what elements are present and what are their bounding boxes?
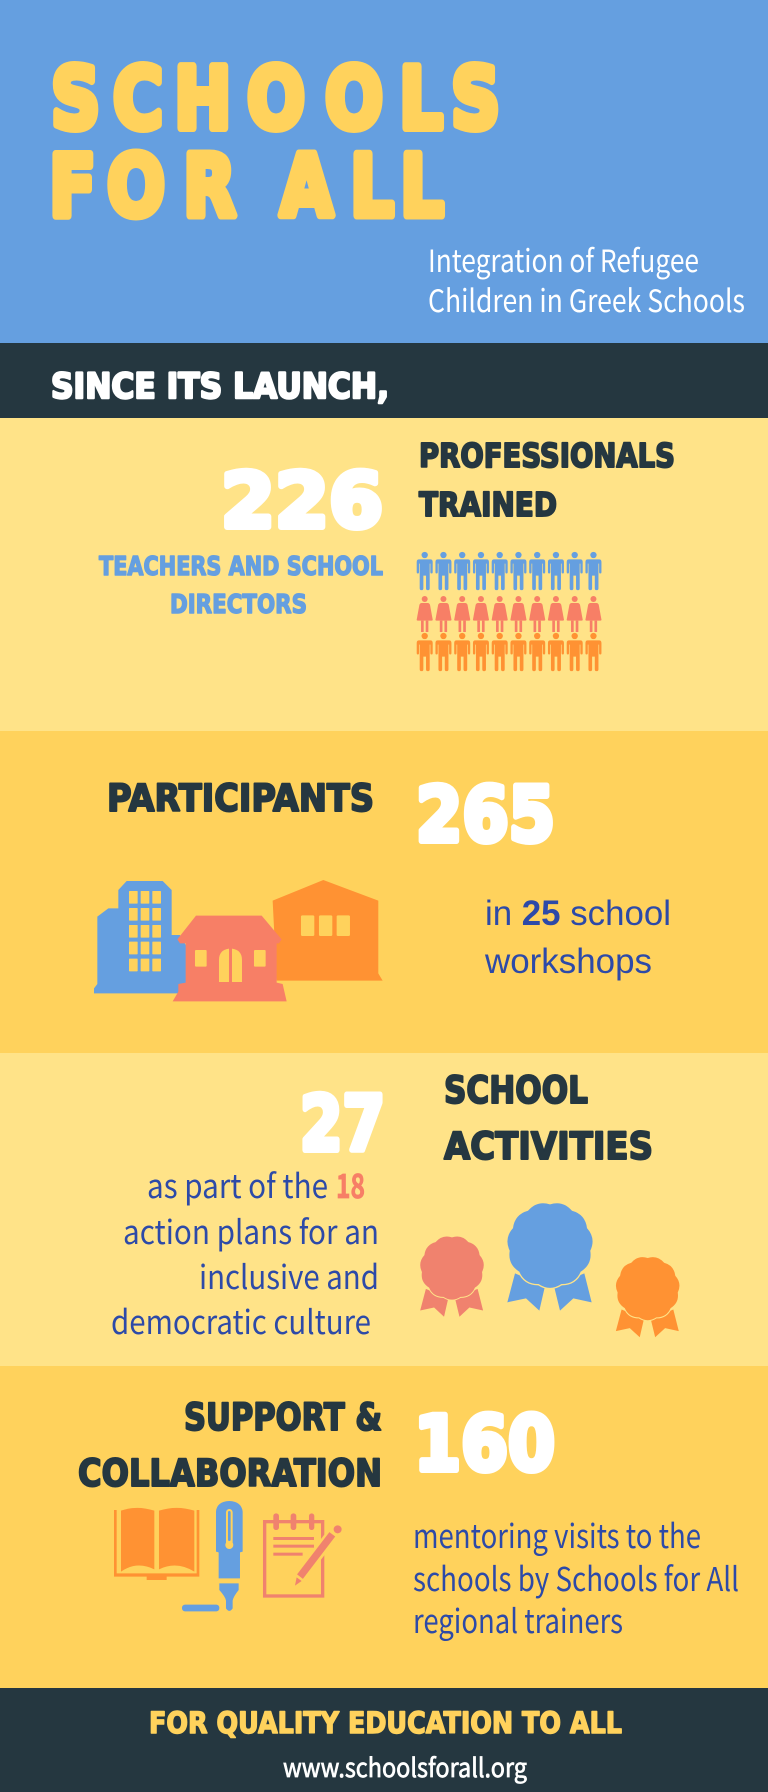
title: Schools for All: FOR ALL <box>49 138 444 236</box>
title: Schools for All: SCHOOLS <box>51 51 500 149</box>
icon: orange rosette <box>616 1257 679 1337</box>
title: Schools for All <box>49 51 500 236</box>
icon: salmon rosette <box>420 1237 484 1317</box>
panel: header <box>0 0 768 343</box>
heading: support and collaboration: SUPPORT & <box>184 1396 382 1439</box>
number: 160: 160 <box>414 1399 555 1488</box>
icon: open book <box>114 1508 199 1580</box>
heading: professionals trained <box>419 436 675 524</box>
text: action plans description <box>111 1160 379 1344</box>
heading: school activities: ACTIVITIES <box>444 1125 653 1168</box>
icons: book, pen, notepad <box>114 1501 342 1611</box>
icon: salmon school <box>173 916 287 1001</box>
number: 27: 27 <box>300 1079 385 1168</box>
icon: fountain pen <box>182 1501 243 1611</box>
footer <box>0 1688 768 1792</box>
icon: blue rosette <box>507 1203 593 1311</box>
subtitle <box>428 236 745 321</box>
number: 226: 226 <box>221 456 383 545</box>
panel: professionals trained <box>0 418 768 731</box>
icon: notepad with pencil <box>265 1513 342 1596</box>
banner: since its launch <box>0 343 768 418</box>
text: mentoring visits <box>413 1510 739 1643</box>
panel: participants <box>0 731 768 1053</box>
text: action plans description: 18 <box>336 1160 365 1208</box>
heading: school activities: SCHOOL <box>444 1069 588 1112</box>
icon: school buildings <box>94 880 383 1001</box>
banner: since its launch: SINCE ITS LAUNCH, <box>51 367 389 407</box>
heading: professionals trained: TRAINED <box>419 485 557 524</box>
heading: school activities <box>444 1069 653 1168</box>
footer slogan: FOR QUALITY EDUCATION TO ALL <box>149 1706 622 1740</box>
heading: professionals trained: PROFESSIONALS <box>419 436 675 475</box>
text: action plans description: action plans for an <box>123 1206 379 1254</box>
heading: support and collaboration: COLLABORATION <box>78 1452 382 1495</box>
text: action plans description: as part of the <box>147 1160 328 1208</box>
panel: school activities <box>0 1053 768 1366</box>
text: action plans description: inclusive and <box>199 1251 379 1299</box>
text: in 25 school workshops <box>484 894 671 981</box>
icon: blue tower <box>94 881 187 993</box>
panel: support and collaboration <box>0 1366 768 1688</box>
number: 265: 265 <box>416 770 555 859</box>
caption: teachers and school directors: TEACHERS AND SCHOOL <box>99 552 383 582</box>
caption: teachers and school directors: DIRECTORS <box>170 590 307 620</box>
heading: participants: PARTICIPANTS <box>107 777 374 820</box>
footer url: www.schoolsforall.org <box>283 1748 527 1785</box>
subtitle: Integration of Refugee <box>428 236 699 281</box>
text: in 25 school workshops: workshops <box>484 942 652 981</box>
text: action plans description: democratic culture <box>111 1296 371 1344</box>
heading: support and collaboration <box>78 1396 382 1495</box>
text: in 25 school workshops: in 25 school <box>485 894 671 933</box>
text: mentoring visits: regional trainers <box>413 1595 623 1643</box>
text: mentoring visits: mentoring visits to the <box>413 1510 701 1558</box>
icon: orange building <box>273 880 383 981</box>
icon: rows of people <box>417 552 601 671</box>
caption: teachers and school directors <box>99 552 383 620</box>
